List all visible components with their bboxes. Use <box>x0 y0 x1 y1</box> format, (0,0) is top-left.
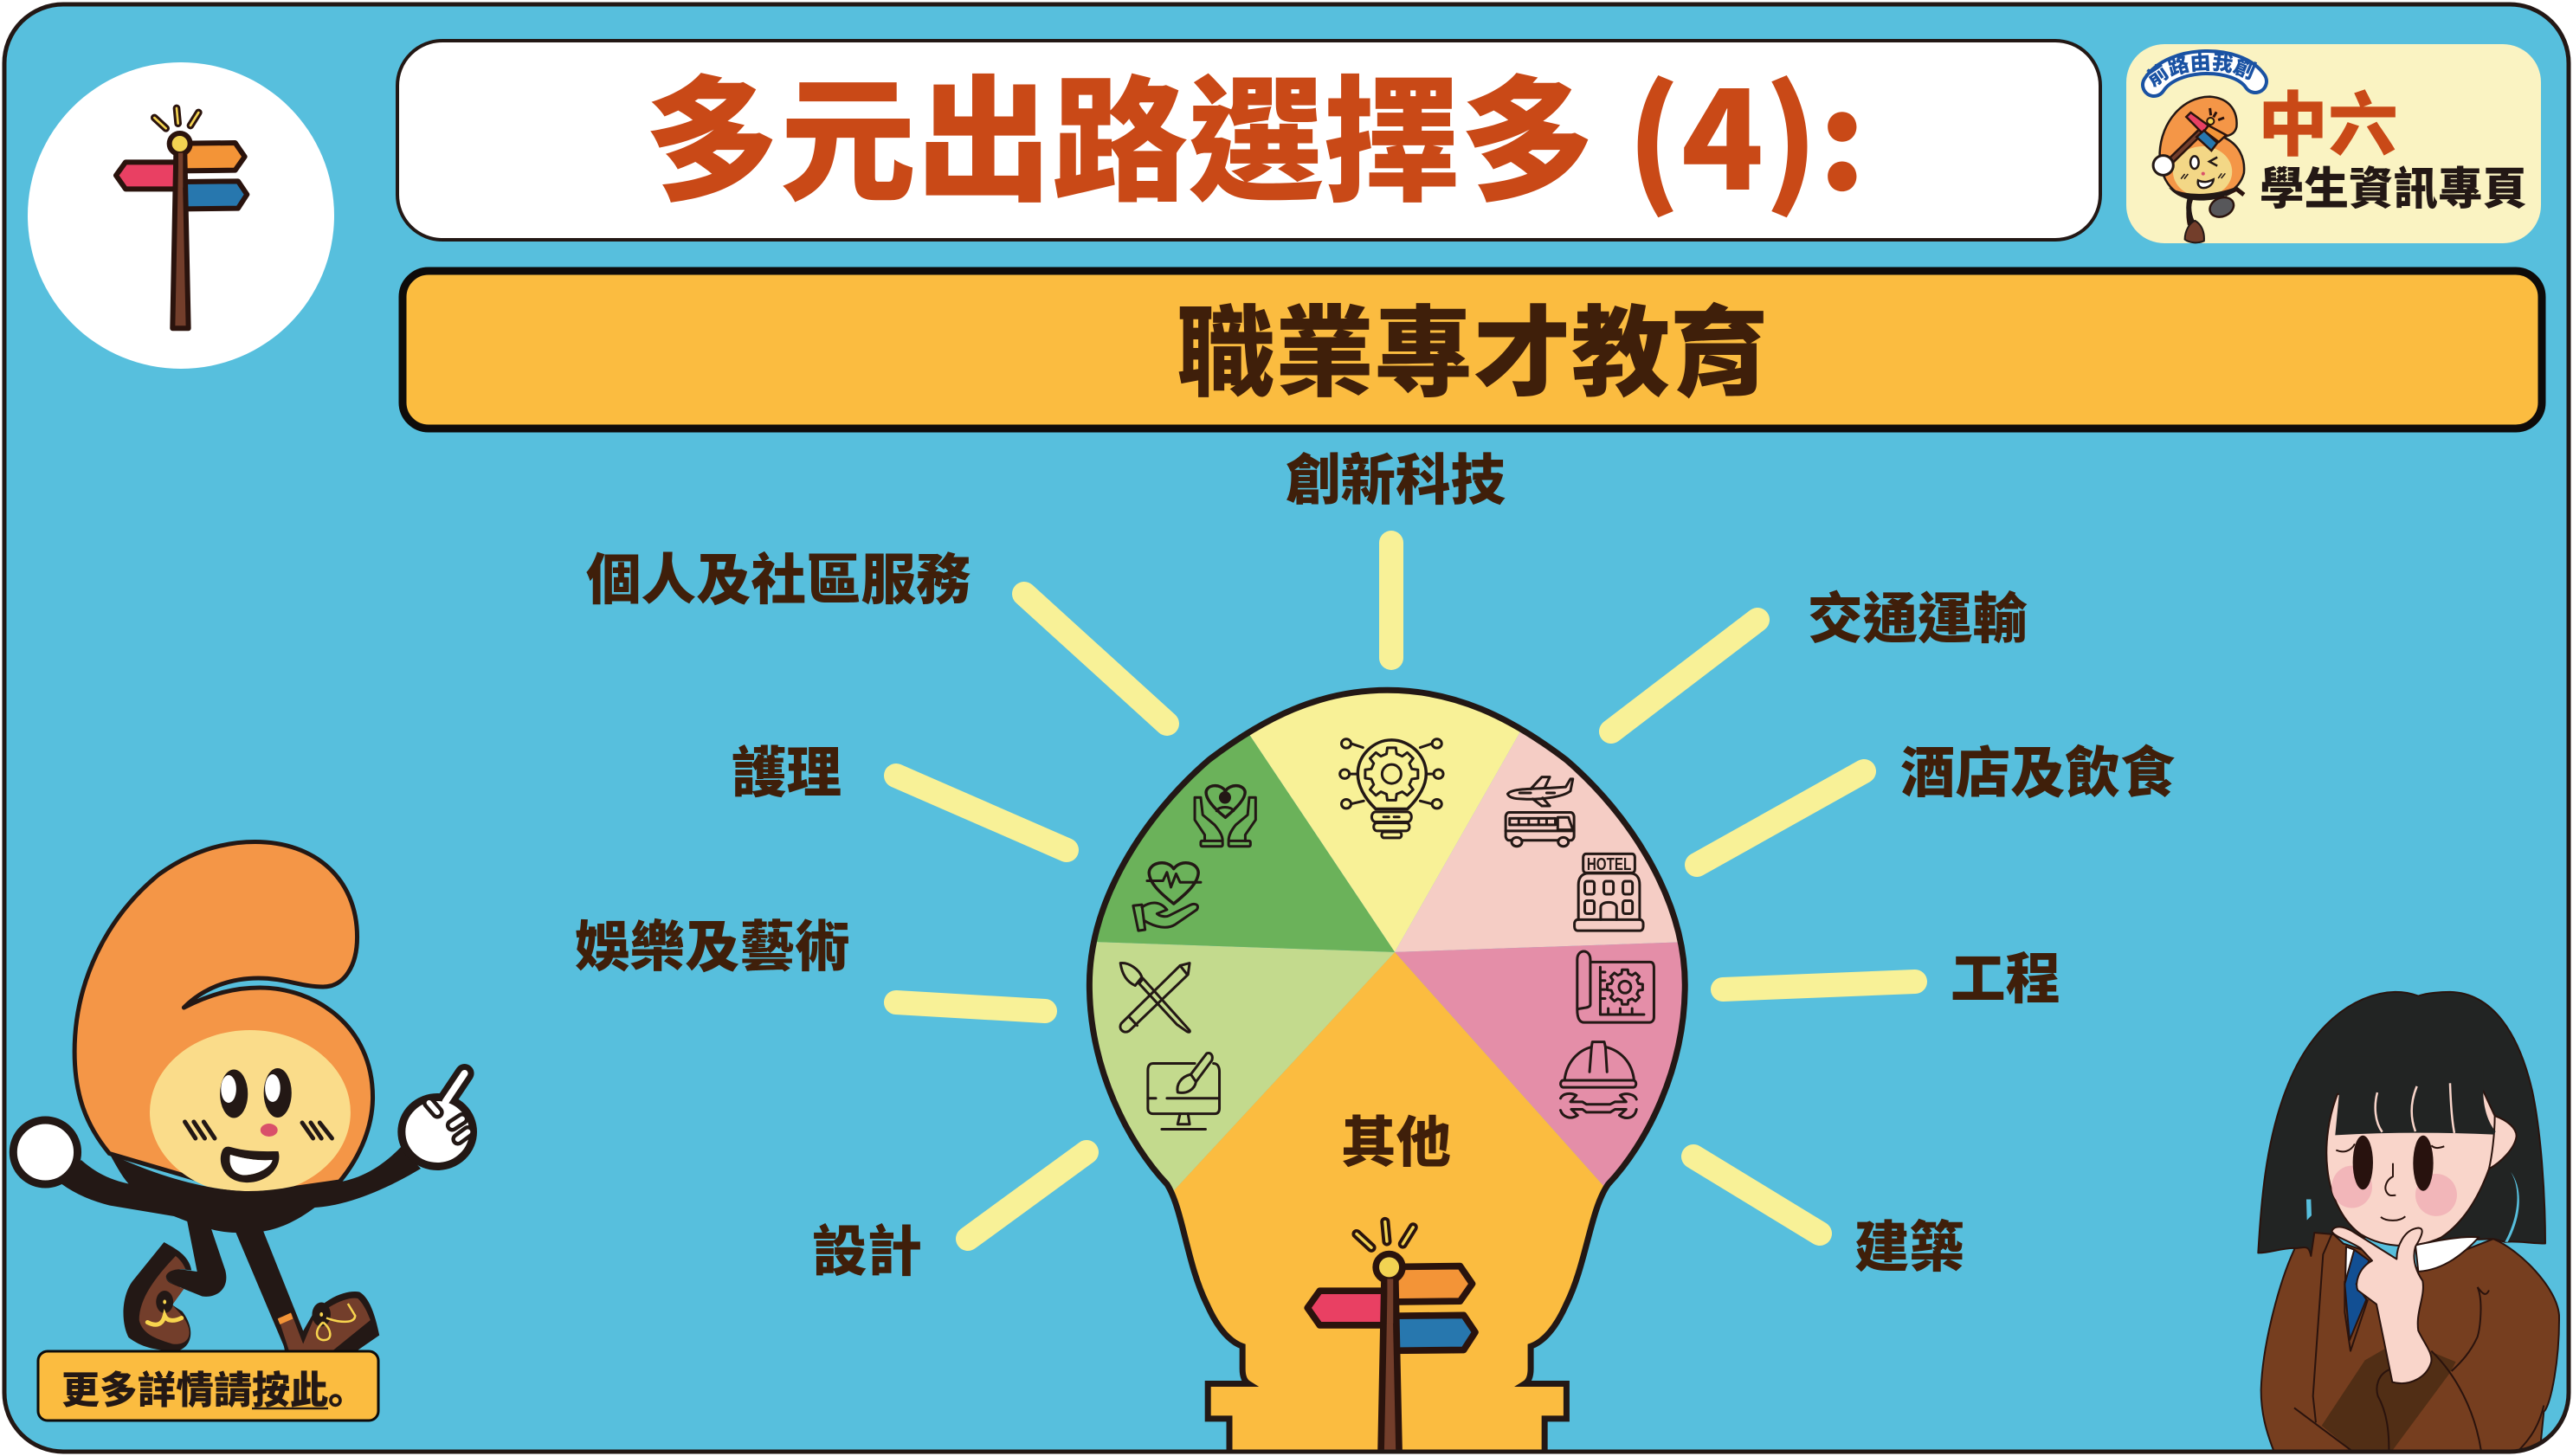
label: 護理: 護理 <box>732 744 842 804</box>
logo mascot <box>2153 97 2244 242</box>
ray: architecture <box>1693 1156 1820 1234</box>
character: orange number six mascot <box>13 841 473 1352</box>
ray: transport <box>1611 620 1757 731</box>
logo text: 中六: 中六 <box>2258 87 2398 165</box>
icon: helmet and wrench <box>1561 1042 1636 1118</box>
label: other category: 其他 <box>1341 1113 1451 1174</box>
ray: design <box>968 1152 1087 1239</box>
mascot mouth <box>221 1147 279 1182</box>
button: more details <box>38 1351 378 1421</box>
jacket shade <box>2322 1348 2456 1455</box>
label: 娛樂及藝術: 娛樂及藝術 <box>575 918 850 978</box>
title box <box>397 33 2100 240</box>
student eyes <box>2353 1136 2373 1189</box>
mascot right shoe <box>278 1292 379 1351</box>
icon: hotel: HOTEL <box>1587 854 1631 873</box>
student jacket <box>2260 1234 2560 1449</box>
mascot left shoe <box>123 1242 191 1350</box>
label: 個人及社區服務: 個人及社區服務 <box>586 551 971 611</box>
icon: caring hands <box>1195 786 1255 847</box>
label: 設計: 設計 <box>812 1222 922 1283</box>
label: 工程: 工程 <box>1951 950 2060 1010</box>
ray: hotel <box>1697 771 1864 865</box>
label: 建築: 建築 <box>1854 1218 1964 1279</box>
ray: nursing <box>896 776 1067 850</box>
icon: innovation bulb <box>1340 739 1443 838</box>
icon: heart in hand <box>1133 863 1201 931</box>
jacket seams <box>2294 1234 2544 1455</box>
subtitle banner <box>403 271 2542 428</box>
icon: digital design screen <box>1148 1053 1220 1130</box>
mascot eyes <box>220 1068 292 1118</box>
logo text: 學生資訊專頁: 學生資訊專頁 <box>2260 164 2527 214</box>
icon: signpost in white circle <box>28 62 334 369</box>
logo panel <box>2126 44 2541 244</box>
icon: brush and pen <box>1120 963 1190 1032</box>
icon: plane and bus <box>1506 777 1574 847</box>
student bangs <box>2335 1090 2496 1136</box>
category labels and rays <box>575 451 2175 1283</box>
icon: blueprint <box>1577 951 1654 1022</box>
ray: entertainment <box>896 1002 1045 1011</box>
character: thinking student <box>2258 992 2559 1455</box>
mascot nose <box>261 1124 278 1137</box>
student blush <box>2331 1166 2372 1208</box>
ray: engineering <box>1723 982 1915 989</box>
ray: top <box>1379 543 1403 658</box>
student nose and mouth <box>2381 1163 2405 1221</box>
student ear <box>2489 1116 2517 1169</box>
mascot left hand <box>13 1120 78 1184</box>
title: 多元出路選擇多 (4): <box>644 33 1866 229</box>
label: 交通運輸: 交通運輸 <box>1808 589 2028 650</box>
student hair <box>2258 992 2545 1256</box>
mascot body and limbs <box>61 1147 421 1352</box>
icon: hotel <box>1575 854 1643 931</box>
mascot whiskers <box>185 1122 332 1138</box>
student tie <box>2344 1250 2370 1340</box>
badge: 前路由我創: 前路由我創 <box>2145 53 2258 87</box>
label: 創新科技: 創新科技 <box>1286 451 1506 512</box>
mascot right hand <box>402 1073 473 1167</box>
mascot face <box>150 1030 351 1195</box>
icon: signpost in bulb <box>1307 1221 1475 1456</box>
label: 酒店及飲食: 酒店及飲食 <box>1900 744 2175 804</box>
ray: personal services <box>1024 594 1167 724</box>
student face <box>2326 1091 2495 1246</box>
student collar <box>2415 1237 2479 1272</box>
light bulb pie <box>1074 675 1710 1456</box>
mascot head <box>74 841 373 1195</box>
student hand <box>2331 1227 2431 1383</box>
subtitle: 職業專才教育 <box>1177 300 1769 409</box>
button text: 更多詳情請按此。 <box>61 1359 366 1414</box>
